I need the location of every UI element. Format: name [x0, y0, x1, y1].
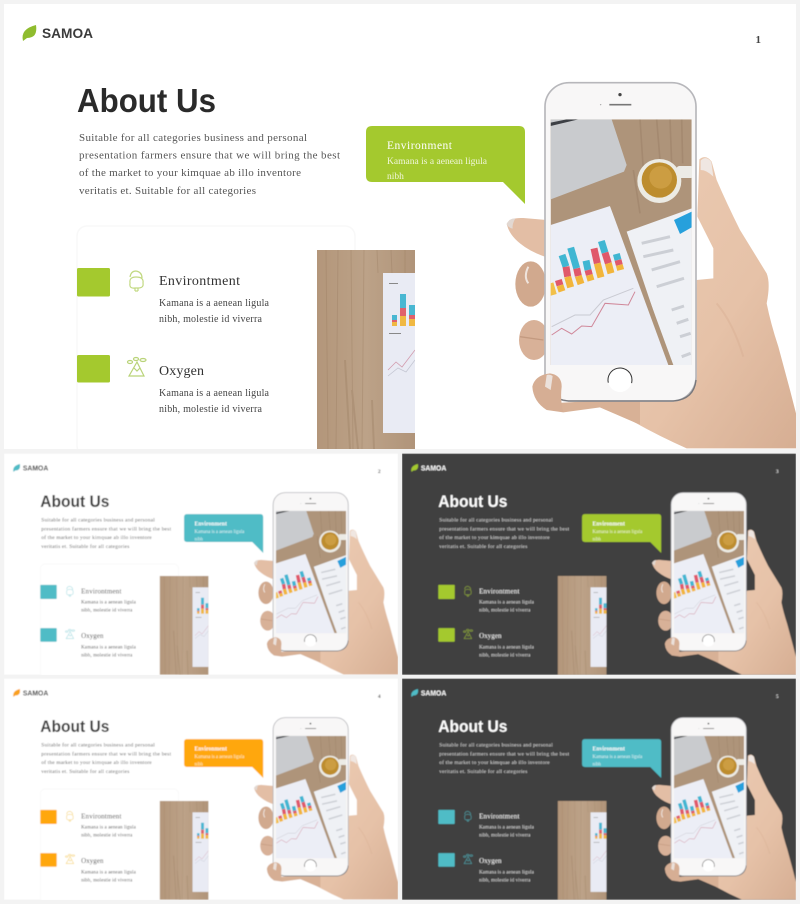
photo: wood desk	[558, 801, 606, 900]
icon: mountain and clouds	[65, 854, 75, 864]
icon: tree	[67, 586, 73, 596]
feature text: oxygen	[479, 871, 535, 883]
logo: SAMOA	[23, 690, 48, 697]
page number: 1	[756, 34, 761, 46]
intro text: veritatis et. Suitable for all categories	[41, 543, 129, 550]
intro text	[41, 517, 172, 550]
feature heading: environment: Environtment	[159, 274, 240, 289]
feature text: environment	[159, 298, 270, 325]
intro text: presentation farmers ensure that we will bring the best	[41, 750, 172, 757]
logo: SAMOA	[421, 465, 446, 472]
feature text: environment: Kamana is a aenean ligula	[479, 826, 535, 831]
feature heading: oxygen: Oxygen	[159, 364, 204, 379]
feature heading: oxygen: Oxygen	[81, 632, 104, 640]
marker: environment	[438, 810, 455, 824]
title: About Us	[40, 718, 109, 736]
feature text: environment	[81, 601, 137, 614]
callout: Kamana is a aenean ligula	[593, 755, 643, 760]
callout: nibh	[593, 538, 602, 543]
slide 4: orange light slide	[4, 678, 398, 903]
feature text: environment	[81, 826, 137, 839]
icon: mountain and clouds	[128, 358, 146, 376]
feature text: oxygen: nibh, molestie id viverra	[159, 404, 263, 415]
marker: oxygen	[438, 853, 455, 867]
intro text	[439, 517, 570, 550]
intro text: Suitable for all categories business and personal	[41, 742, 155, 749]
intro text: of the market to your kimquae ab illo inventore	[439, 534, 550, 541]
feature text: environment: nibh, molestie id viverra	[479, 609, 531, 614]
feature heading: oxygen: Oxygen	[81, 857, 104, 865]
feature text: oxygen	[81, 871, 137, 883]
icon: tree	[67, 811, 73, 821]
page number: 5	[776, 694, 779, 700]
callout	[582, 739, 661, 778]
logo	[13, 464, 48, 472]
feature text: oxygen	[81, 646, 137, 658]
icon: tree	[465, 811, 471, 821]
callout: Environment	[593, 522, 625, 528]
icon: tree	[465, 586, 471, 596]
feature card	[77, 268, 269, 414]
title: About Us	[438, 493, 507, 511]
intro text	[79, 132, 340, 197]
feature card	[40, 584, 177, 675]
intro text: Suitable for all categories business and personal	[439, 742, 553, 749]
feature text: environment: Kamana is a aenean ligula	[81, 826, 137, 831]
feature heading: environment: Environtment	[479, 587, 519, 595]
callout	[184, 739, 263, 778]
callout: Kamana is a aenean ligula	[387, 157, 488, 167]
feature text: oxygen	[479, 646, 535, 658]
feature heading: environment: Environtment	[81, 587, 121, 595]
marker: oxygen	[438, 628, 455, 642]
marker: oxygen	[77, 355, 110, 382]
phone in hand	[507, 83, 796, 448]
title: About Us	[438, 718, 507, 736]
marker: oxygen	[40, 853, 57, 867]
intro text: of the market to your kimquae ab illo inventore	[41, 534, 152, 541]
logo	[411, 464, 446, 472]
slide 3: green dark slide	[402, 453, 796, 675]
feature text: oxygen: Kamana is a aenean ligula	[479, 871, 535, 876]
marker: oxygen	[40, 628, 57, 642]
feature text: environment: nibh, molestie id viverra	[479, 834, 531, 839]
feature heading: oxygen: Oxygen	[479, 632, 502, 640]
page number: 3	[776, 469, 779, 475]
photo: wood desk	[558, 576, 606, 675]
feature card	[40, 789, 179, 903]
logo: SAMOA	[23, 465, 48, 472]
callout: Kamana is a aenean ligula	[195, 755, 245, 760]
marker: environment	[77, 268, 110, 296]
feature list	[438, 585, 535, 658]
intro text: Suitable for all categories business and personal	[41, 517, 155, 524]
callout	[184, 514, 263, 553]
feature text: oxygen: nibh, molestie id viverra	[479, 878, 531, 883]
callout: nibh	[593, 763, 602, 768]
page number: 4	[378, 694, 381, 700]
intro text: presentation farmers ensure that we will bring the best	[439, 525, 570, 532]
feature heading: environment: Environtment	[479, 812, 519, 820]
photo: wood desk	[160, 576, 208, 675]
feature text: environment: Kamana is a aenean ligula	[479, 601, 535, 606]
callout	[366, 126, 525, 204]
feature text: oxygen: nibh, molestie id viverra	[81, 653, 133, 658]
feature list	[438, 810, 535, 883]
feature text: oxygen: nibh, molestie id viverra	[479, 653, 531, 658]
logo: SAMOA	[42, 25, 93, 41]
icon: mountain and clouds	[65, 629, 75, 639]
callout: Environment	[593, 747, 625, 753]
feature text: environment: Kamana is a aenean ligula	[81, 601, 137, 606]
callout: nibh	[195, 763, 204, 768]
callout: Kamana is a aenean ligula	[593, 530, 643, 535]
intro text: Suitable for all categories business and personal	[439, 517, 553, 524]
feature text: environment: nibh, molestie id viverra	[159, 314, 263, 325]
phone in hand	[254, 718, 398, 900]
callout: Environment	[387, 140, 453, 152]
phone in hand	[652, 718, 796, 900]
feature text: environment: nibh, molestie id viverra	[81, 834, 133, 839]
feature text: oxygen: Kamana is a aenean ligula	[159, 388, 270, 399]
feature text: environment	[479, 601, 535, 614]
feature heading: oxygen: Oxygen	[479, 857, 502, 865]
marker: environment	[40, 810, 57, 824]
callout: nibh	[195, 538, 204, 543]
callout	[582, 514, 661, 553]
intro text	[41, 742, 172, 775]
feature text: oxygen: Kamana is a aenean ligula	[81, 646, 137, 651]
feature heading: environment: Environtment	[81, 812, 121, 820]
slide 1: large green light slide	[4, 4, 796, 456]
marker: environment	[438, 585, 455, 599]
intro text: of the market to your kimquae ab illo inventore	[439, 759, 550, 766]
intro text: presentation farmers ensure that we will bring the best	[41, 525, 172, 532]
intro text: presentation farmers ensure that we will bring the best	[439, 750, 570, 757]
icon: tree	[130, 271, 143, 291]
feature text: environment	[479, 826, 535, 839]
callout: Kamana is a aenean ligula	[195, 530, 245, 535]
photo: wood desk	[317, 250, 415, 449]
feature text: oxygen: Kamana is a aenean ligula	[81, 871, 137, 876]
feature text: environment: nibh, molestie id viverra	[81, 609, 133, 614]
feature text: oxygen: nibh, molestie id viverra	[81, 878, 133, 883]
phone in hand	[254, 493, 398, 675]
icon: mountain and clouds	[463, 854, 473, 864]
intro text: of the market to your kimquae ab illo inventore	[41, 759, 152, 766]
intro text: veritatis et. Suitable for all categories	[439, 543, 527, 550]
page number: 2	[378, 469, 381, 475]
marker: environment	[40, 585, 57, 599]
photo: wood desk	[160, 801, 208, 900]
phone in hand	[652, 493, 796, 675]
logo	[411, 689, 446, 697]
feature text: oxygen	[159, 388, 270, 415]
title: About Us	[77, 82, 216, 119]
intro text: veritatis et. Suitable for all categories	[41, 768, 129, 775]
slide 2: teal light slide	[4, 453, 398, 678]
slide 5: teal dark slide	[402, 678, 796, 900]
feature text: environment: Kamana is a aenean ligula	[159, 298, 270, 309]
intro text: of the market to your kimquae ab illo inventore	[79, 167, 301, 179]
callout: nibh	[387, 172, 404, 182]
intro text	[439, 742, 570, 775]
title: About Us	[40, 493, 109, 511]
intro text: presentation farmers ensure that we will bring the best	[79, 150, 340, 162]
logo: SAMOA	[421, 690, 446, 697]
feature text: oxygen: Kamana is a aenean ligula	[479, 646, 535, 651]
logo	[13, 689, 48, 697]
icon: mountain and clouds	[463, 629, 473, 639]
intro text: Suitable for all categories business and personal	[79, 132, 307, 144]
intro text: veritatis et. Suitable for all categories	[79, 185, 256, 197]
intro text: veritatis et. Suitable for all categories	[439, 768, 527, 775]
callout: Environment	[195, 522, 227, 528]
callout: Environment	[195, 747, 227, 753]
